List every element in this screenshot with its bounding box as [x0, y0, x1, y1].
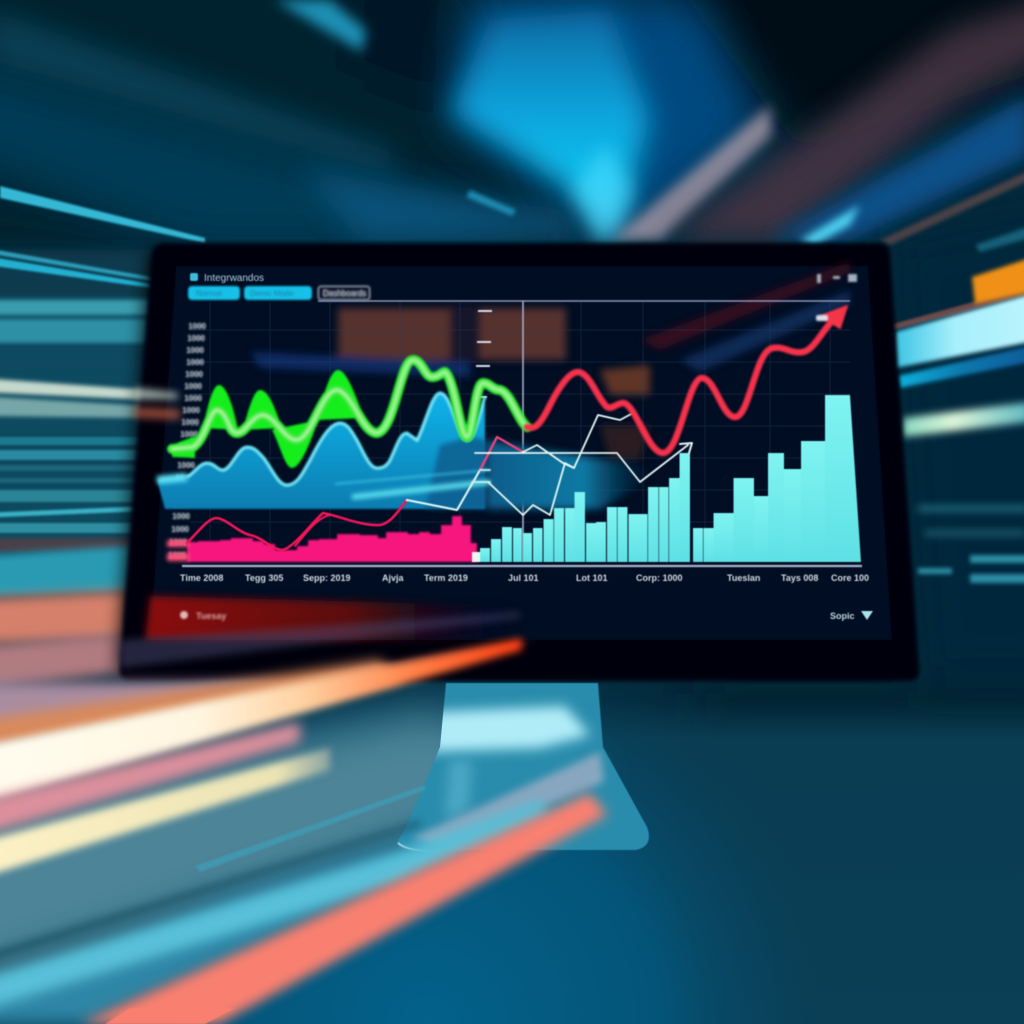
- y axis labels: 1000: [171, 525, 190, 534]
- footer right label: Sopic: [830, 611, 855, 621]
- x axis labels: Ajvja: [382, 573, 405, 583]
- x axis labels: Jul 101: [508, 573, 539, 583]
- header: title: Integrwandos: [204, 273, 264, 284]
- x axis line: [182, 565, 862, 567]
- header: window icons: [817, 274, 857, 283]
- floor glow: [0, 640, 1024, 1024]
- blue area series: [157, 393, 650, 509]
- monitor left edge shadow: [118, 250, 172, 672]
- y axis labels: 1000: [185, 370, 204, 379]
- y axis labels: 1000: [186, 346, 205, 355]
- y axis labels: 1000: [182, 406, 201, 415]
- x axis labels: Time 2008: [180, 573, 223, 583]
- x axis labels: Tueslan: [727, 573, 760, 583]
- x axis labels: Tegg 305: [245, 573, 283, 583]
- pink bar series: [187, 516, 477, 562]
- y axis labels: 1000: [179, 442, 198, 451]
- x axis labels: Tays 008: [781, 573, 818, 583]
- y axis labels: [168, 322, 207, 560]
- desk surface: [0, 700, 1024, 1024]
- streaks: left: [0, 247, 155, 690]
- footer right label: [830, 611, 873, 621]
- streaks: bottom left: [0, 638, 607, 1024]
- y axis labels: 1000: [174, 487, 193, 496]
- red line series with arrow: [527, 306, 847, 453]
- streaks: top: [0, 0, 1024, 252]
- y axis labels: 1000: [188, 322, 207, 331]
- screen reflection: red blocks: [145, 262, 850, 640]
- crosshair vertical line: [522, 301, 524, 562]
- y axis labels: 1000: [187, 334, 206, 343]
- header: tabs: Dashboards: [323, 289, 366, 298]
- x axis labels: Corp: 1000: [636, 573, 683, 583]
- y axis labels: 1000: [186, 358, 205, 367]
- teal bar series: [472, 395, 861, 562]
- footer left label: [180, 611, 226, 621]
- thin red and white line series: [187, 413, 692, 550]
- streaks: right: [893, 258, 1024, 583]
- green line series: [172, 360, 527, 468]
- y axis labels: 1000: [184, 382, 203, 391]
- monitor: [118, 243, 919, 681]
- streaks over monitor left edge: [120, 388, 540, 682]
- x axis labels: [180, 573, 869, 583]
- y axis labels: 1000: [172, 512, 191, 521]
- x axis labels: Term 2019: [424, 573, 468, 583]
- monitor bezel: [120, 243, 919, 681]
- footer left label: Tuesay: [196, 611, 226, 621]
- y axis labels: 1000: [181, 418, 200, 427]
- monitor screen: [150, 266, 892, 640]
- x axis labels: Sepp: 2019: [303, 573, 351, 583]
- header: tabs: [188, 286, 370, 300]
- mid axis ticks: [473, 311, 492, 397]
- red line label: [816, 315, 828, 321]
- y axis labels: 1000: [180, 430, 199, 439]
- monitor stand: [397, 683, 649, 851]
- left desk haze: [0, 710, 600, 990]
- y axis labels: 1000: [184, 394, 203, 403]
- x axis labels: Lot 101: [576, 573, 608, 583]
- header: tabs: Demo Mode: [250, 289, 294, 298]
- grid lines: [190, 302, 850, 562]
- y axis labels: 1000: [175, 474, 194, 483]
- y axis labels: 1000: [177, 461, 196, 470]
- y axis labels: 1000: [168, 551, 187, 560]
- chart top rule: [318, 300, 850, 302]
- pink glow at axis: [167, 540, 189, 561]
- y axis labels: 1000: [169, 538, 188, 547]
- glow: top centre light: [450, 0, 760, 240]
- header: tabs: Normal: [196, 289, 222, 298]
- x axis labels: Core 100: [831, 573, 869, 583]
- y axis labels: 1000: [173, 500, 192, 509]
